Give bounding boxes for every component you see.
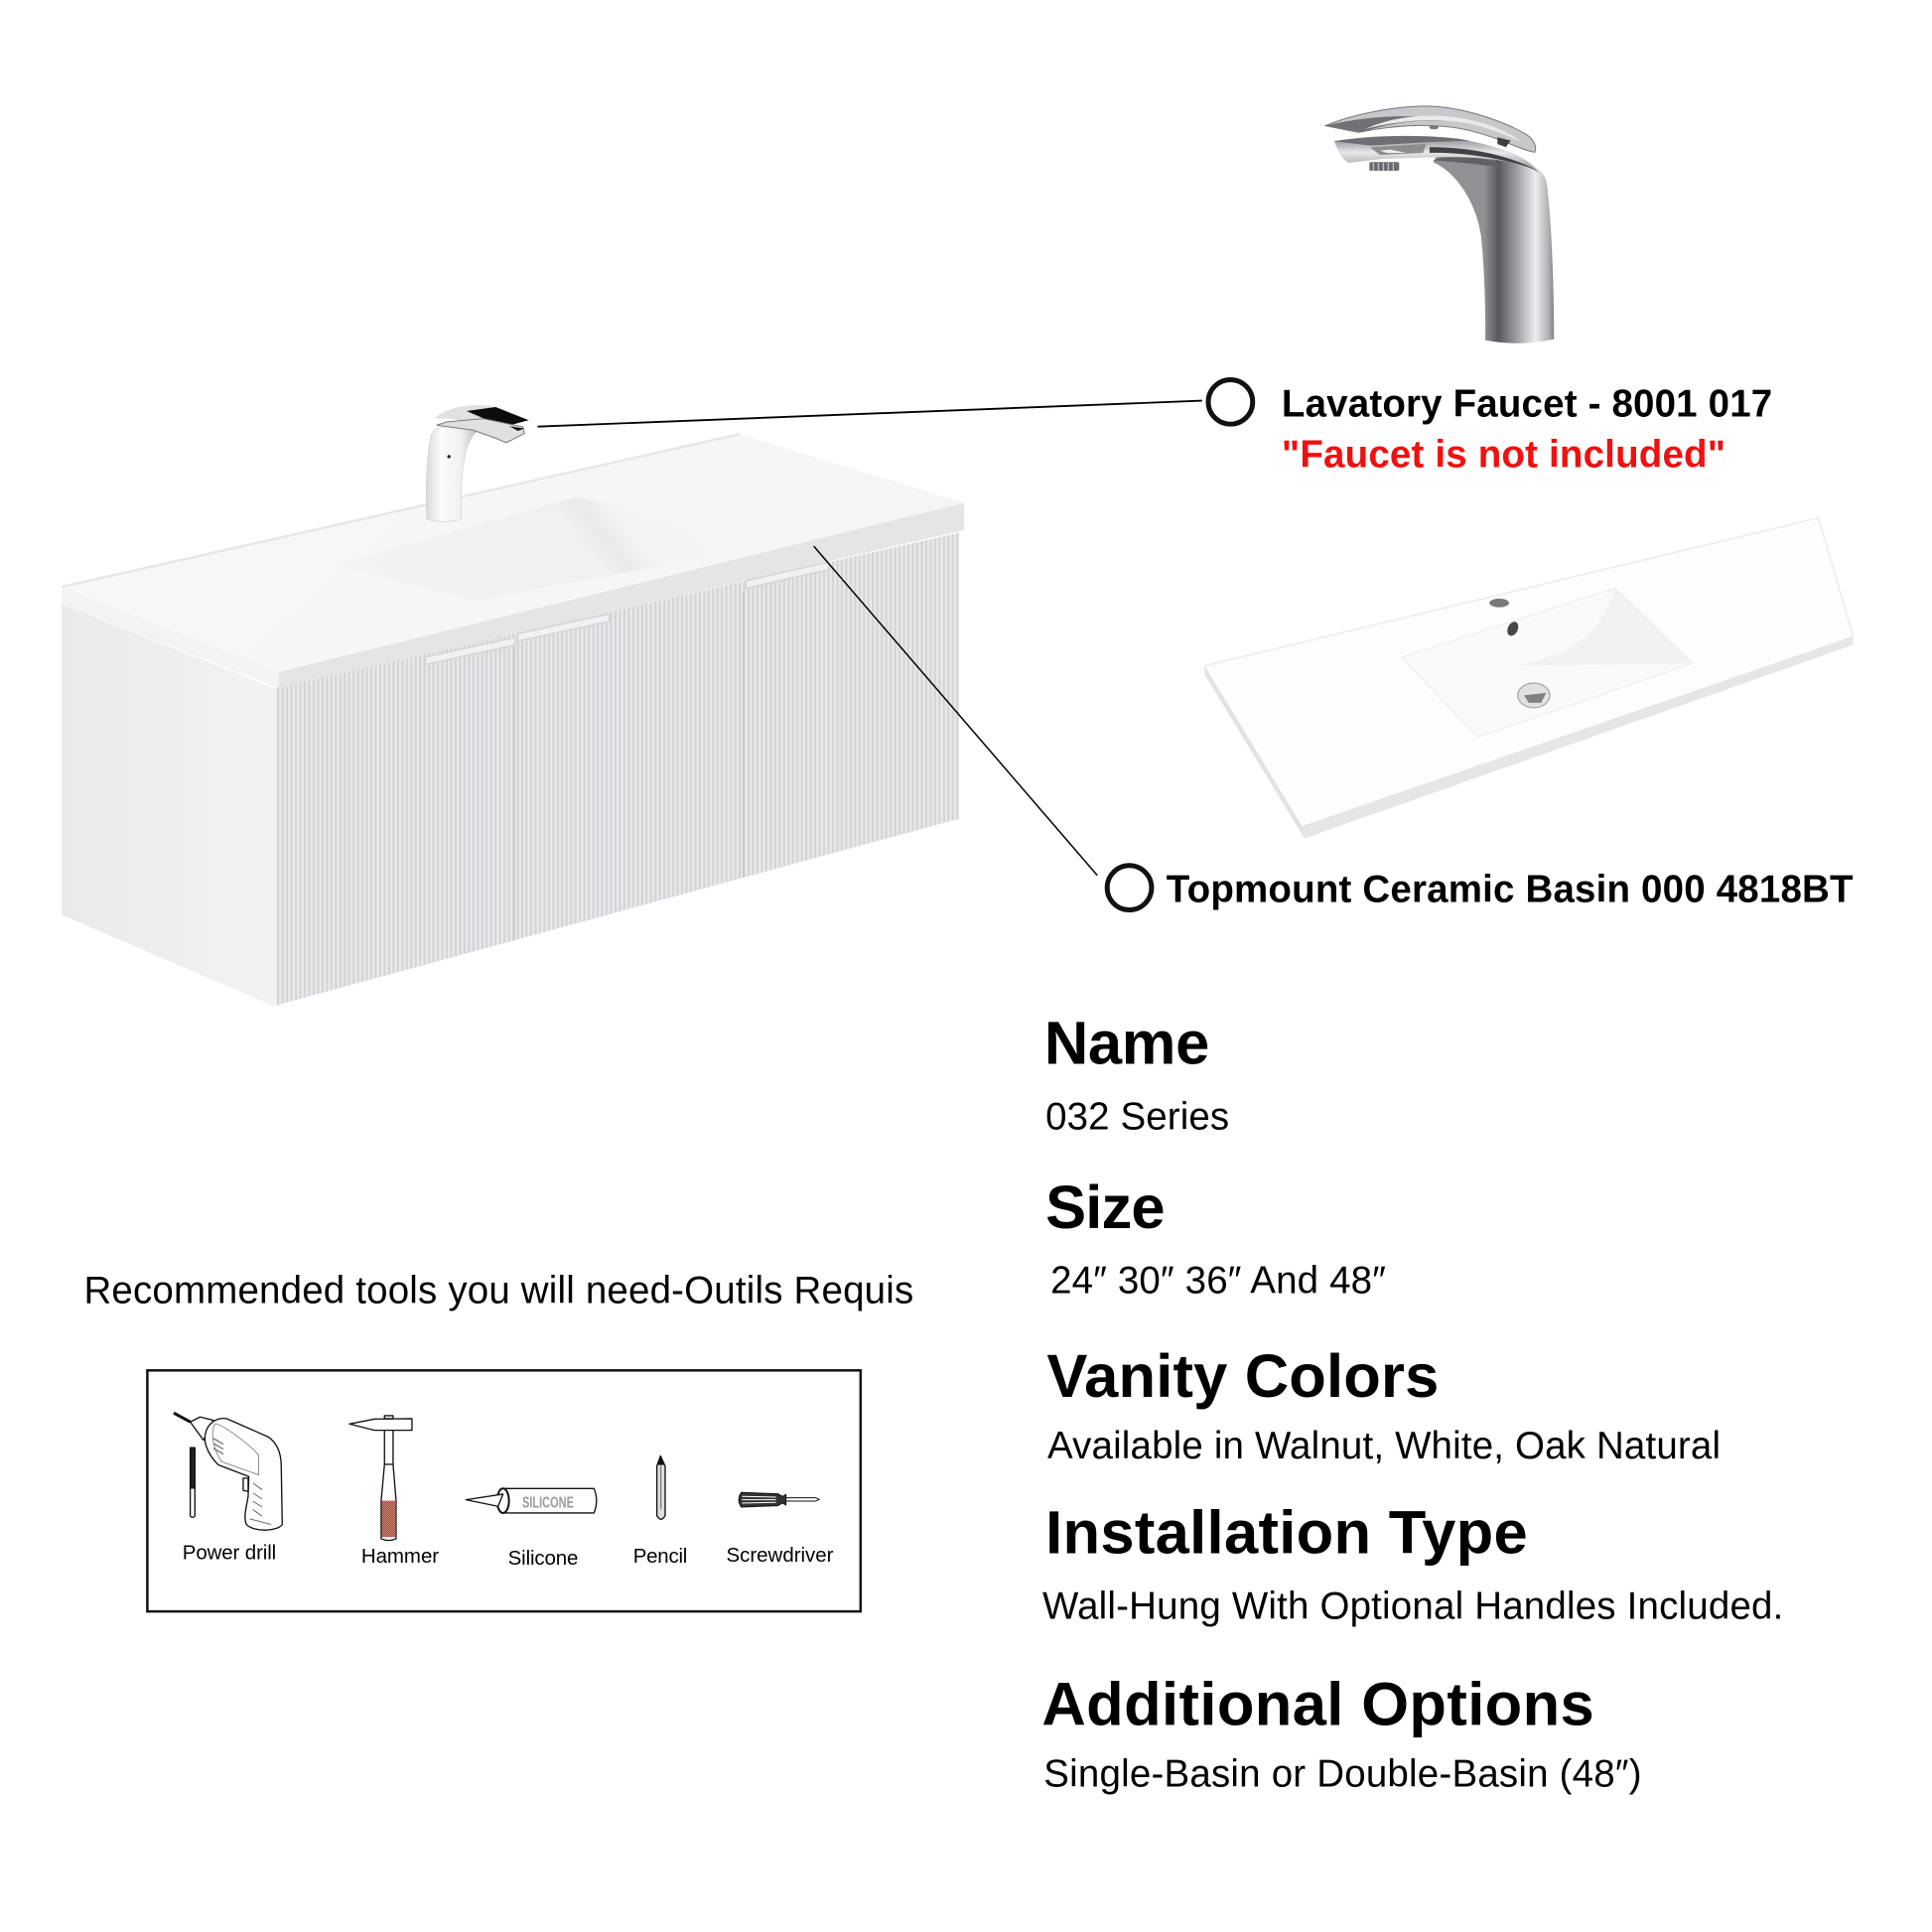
icon: silicone tube: SILICONE [522, 1494, 574, 1511]
icon: silicone tube [466, 1488, 597, 1513]
icon: small faucet on vanity [426, 405, 529, 521]
icon: power drill [174, 1413, 282, 1530]
callout marker: basin [1107, 866, 1152, 909]
icon: hammer [349, 1416, 412, 1541]
label: Screwdriver: Screwdriver [726, 1544, 834, 1567]
heading: recommended tools: Recommended tools you will need-Outils Requis [83, 1270, 913, 1312]
heading: Size: Size [1045, 1173, 1166, 1242]
integrated sink basin [336, 496, 755, 601]
heading: Name: Name [1044, 1010, 1209, 1078]
notice: faucet not included: "Faucet is not included" [1282, 434, 1725, 477]
panel: tools box [147, 1370, 861, 1611]
cabinet fluted front with three doors [274, 532, 959, 1006]
specifications list [1041, 1010, 1783, 1795]
cabinet left side [62, 605, 274, 1006]
callout line: basin [814, 546, 1097, 876]
icon: screwdriver [739, 1492, 819, 1507]
label: Hammer: Hammer [361, 1545, 439, 1568]
countertop [62, 434, 964, 688]
value: installation: Wall-Hung With Optional Handles Included. [1042, 1586, 1783, 1628]
callout line: faucet [537, 401, 1202, 427]
label: Pencil: Pencil [633, 1545, 687, 1568]
door handles [425, 562, 829, 664]
icon: pencil [657, 1456, 665, 1519]
label: Power drill: Power drill [183, 1541, 276, 1564]
label: Silicone: Silicone [508, 1547, 578, 1570]
heading: Installation Type: Installation Type [1045, 1499, 1528, 1568]
vanity cabinet illustration [62, 405, 964, 1006]
heading: Additional Options: Additional Options [1041, 1670, 1594, 1738]
callout marker: faucet [1208, 379, 1253, 424]
label: Topmount Ceramic Basin: Topmount Ceramic Basin 000 4818BT [1167, 868, 1854, 910]
icon: chrome lavatory faucet [1325, 106, 1554, 344]
value: size: 24″ 30″ 36″ And 48″ [1050, 1260, 1386, 1303]
label: Lavatory Faucet: Lavatory Faucet - 8001 017 [1282, 383, 1772, 426]
value: options: Single-Basin or Double-Basin (48″) [1043, 1752, 1642, 1795]
value: colors: Available in Walnut, White, Oak Natural [1047, 1425, 1721, 1467]
icon: ceramic basin [1204, 518, 1854, 838]
heading: Vanity Colors: Vanity Colors [1046, 1342, 1439, 1411]
value: name: 032 Series [1045, 1096, 1229, 1139]
